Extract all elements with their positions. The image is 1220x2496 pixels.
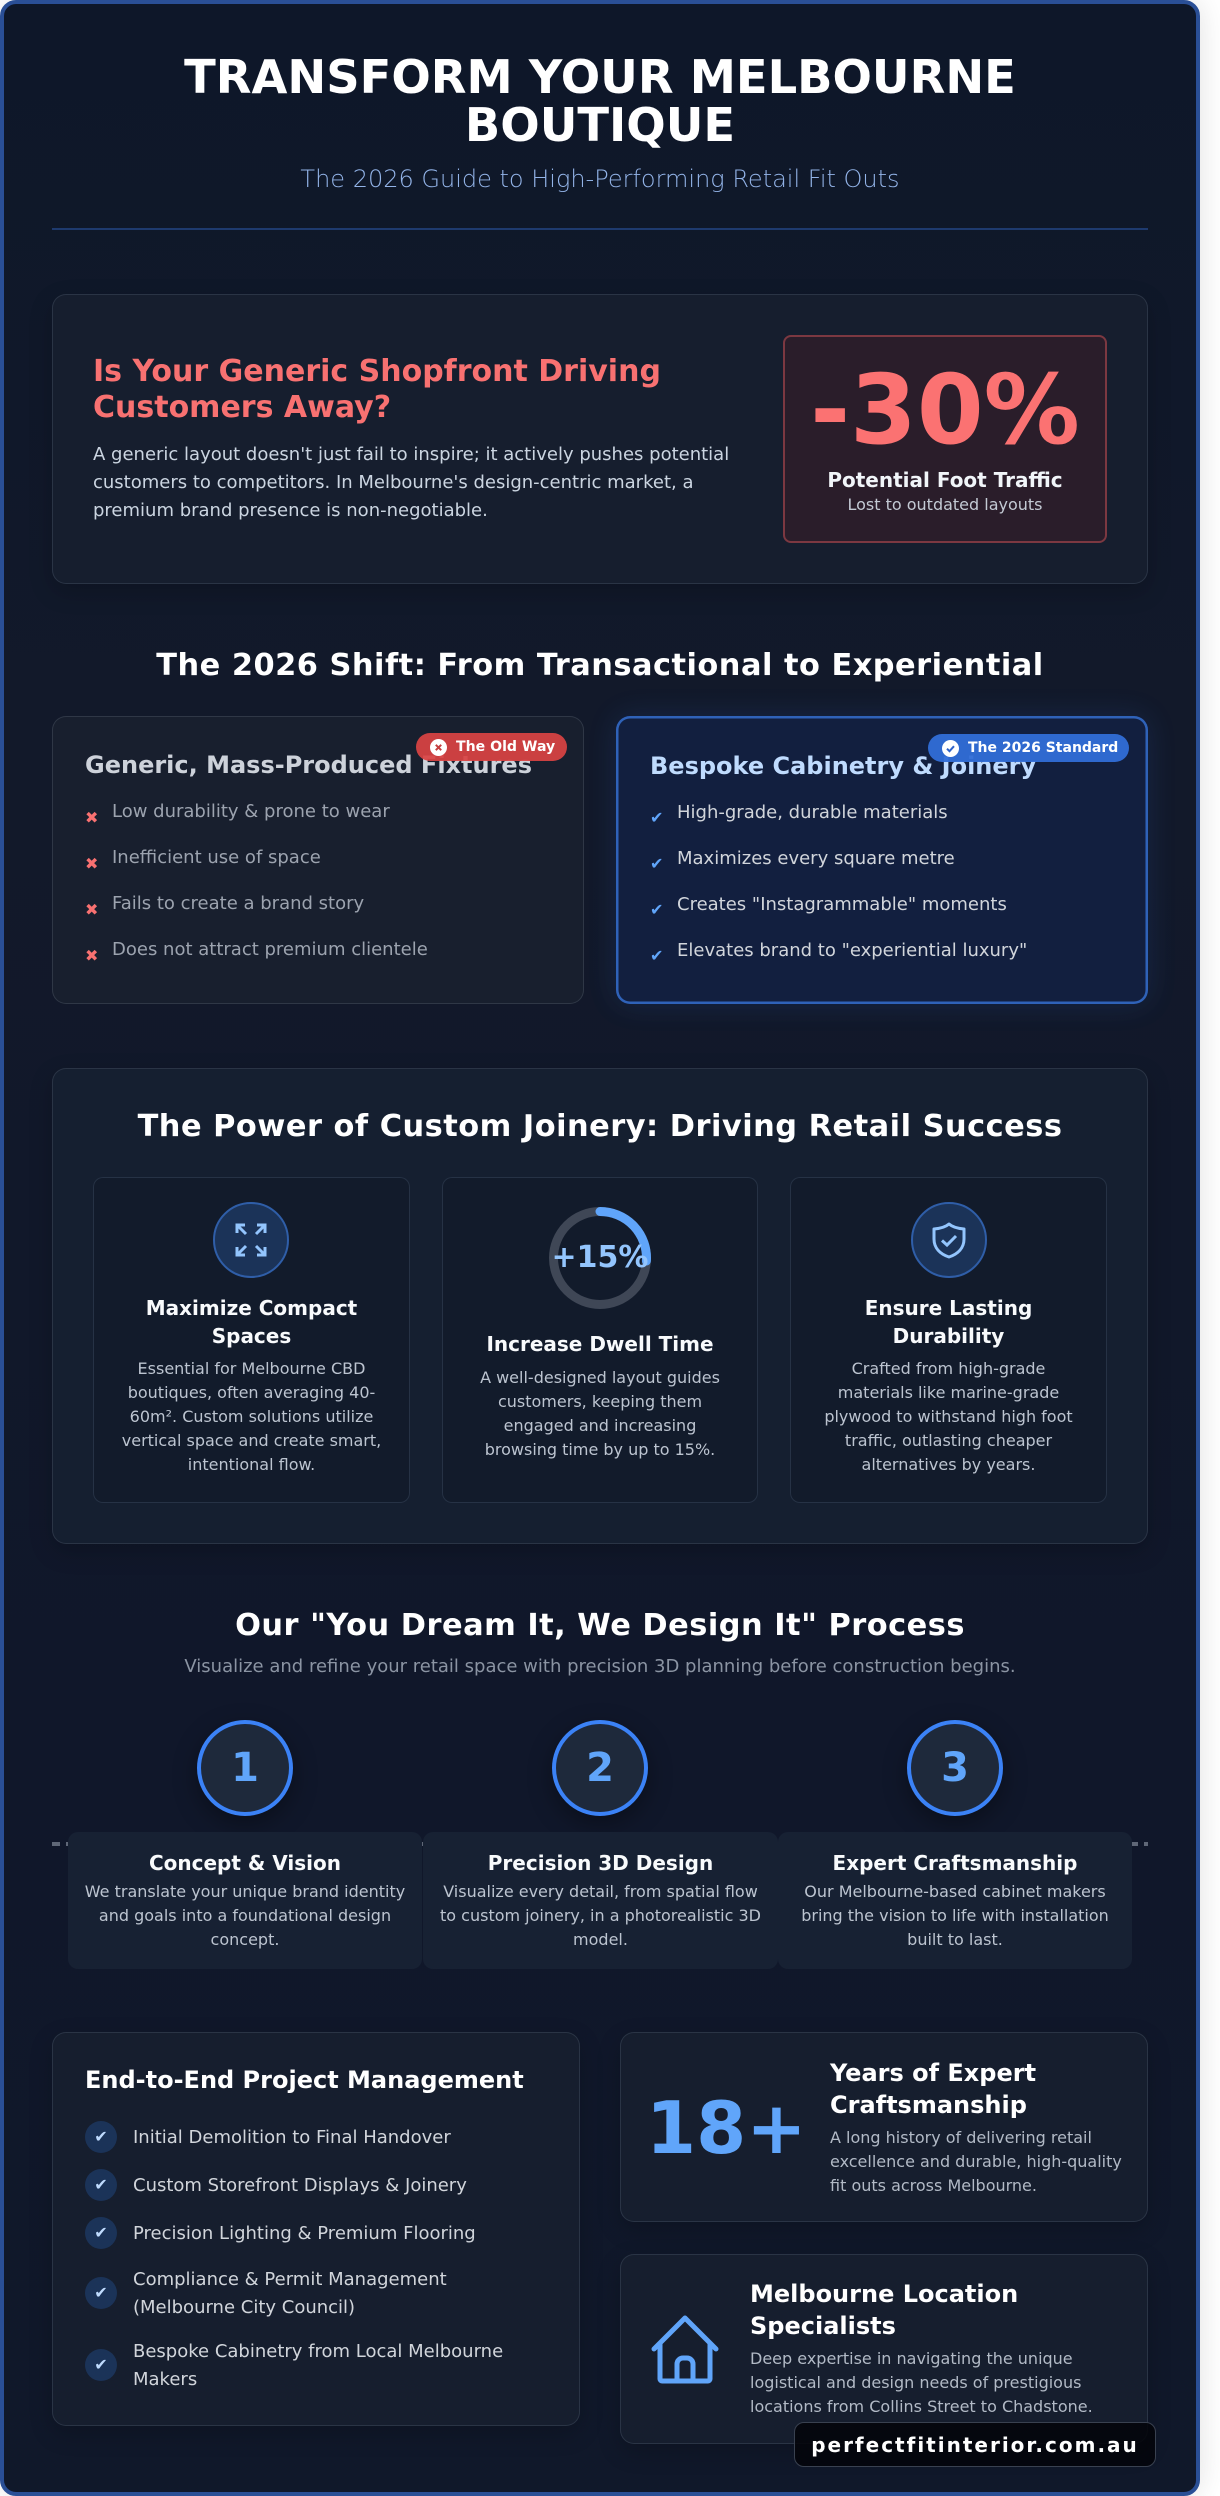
list: old way drawbacks: Inefficient use of space [112, 847, 321, 868]
card title: Maximize Compact [146, 1296, 357, 1320]
checklist: Makers [133, 2369, 197, 2390]
list: standard benefits: ✔ [650, 808, 663, 827]
ring value: +15% [552, 1240, 648, 1275]
stat value: -30% [810, 354, 1080, 466]
card text: 60m². Custom solutions utilize [130, 1407, 373, 1426]
step title: Precision 3D Design [488, 1851, 713, 1875]
card text: excellence and durable, high-quality [830, 2152, 1122, 2171]
problem text: customers to competitors. In Melbourne's design-centric market, a [93, 472, 693, 493]
step title: Concept & Vision [149, 1851, 341, 1875]
badge: the 2026 standard [928, 734, 1129, 762]
standard heading: Bespoke Cabinetry & Joinery [650, 752, 1036, 780]
list: old way drawbacks: ✖ [85, 900, 98, 919]
step card: craftsmanship [778, 1832, 1132, 1969]
checklist: ✔ [94, 2175, 108, 2194]
badge label: The 2026 Standard [968, 740, 1118, 756]
list: standard benefits: ✔ [650, 900, 663, 919]
list: old way drawbacks: ✖ [85, 854, 98, 873]
icon: expand arrows [213, 1202, 289, 1278]
icon: check circle [942, 740, 959, 757]
checklist: ✔ [94, 2127, 108, 2146]
website url: perfectfitinterior.com.au [811, 2433, 1139, 2457]
old way heading: Generic, Mass-Produced Fixtures [85, 751, 532, 779]
checklist: Bespoke Cabinetry from Local Melbourne [133, 2341, 503, 2362]
card text: A long history of delivering retail [830, 2128, 1092, 2147]
section heading: process: Our "You Dream It, We Design It" Process [235, 1608, 965, 1643]
checklist: ✔ [94, 2223, 108, 2242]
feature card: dwell time [442, 1177, 758, 1503]
process subtitle: Visualize and refine your retail space with precision 3D planning before construction begins. [184, 1656, 1016, 1677]
list: old way drawbacks [85, 801, 428, 965]
badge: the old way [416, 733, 567, 761]
list: old way drawbacks: Fails to create a brand story [112, 893, 364, 914]
step text: to custom joinery, in a photorealistic 3D [440, 1906, 761, 1925]
card title: Ensure Lasting [865, 1296, 1032, 1320]
step text [85, 1882, 405, 1949]
card title: Craftsmanship [830, 2091, 1027, 2119]
panel: problem [52, 294, 1148, 584]
problem text [93, 444, 729, 521]
panel: location specialists [620, 2254, 1148, 2444]
website badge [794, 2422, 1156, 2467]
icon: x circle [430, 739, 447, 756]
chart: plus 15 percent ring [549, 1207, 651, 1309]
step text: concept. [211, 1930, 279, 1949]
title: BOUTIQUE [465, 98, 735, 152]
card text: customers, keeping them [498, 1392, 702, 1411]
feature card: compact spaces [93, 1177, 410, 1503]
list: old way drawbacks: Low durability & prone to wear [112, 801, 390, 822]
card title [865, 1296, 1032, 1348]
card text: fit outs across Melbourne. [830, 2176, 1037, 2195]
feature card: durability [790, 1177, 1107, 1503]
card text: traffic, outlasting cheaper [845, 1431, 1052, 1450]
stat label: Potential Foot Traffic [827, 468, 1063, 492]
checklist: Precision Lighting & Premium Flooring [133, 2223, 476, 2244]
card title [830, 2059, 1036, 2119]
checklist: Custom Storefront Displays & Joinery [133, 2175, 467, 2196]
problem text: premium brand presence is non-negotiable. [93, 500, 488, 521]
problem text: A generic layout doesn't just fail to inspire; it actively pushes potential [93, 444, 729, 465]
list: standard benefits: High-grade, durable materials [677, 802, 948, 823]
card text: browsing time by up to 15%. [485, 1440, 715, 1459]
card text: intentional flow. [188, 1455, 315, 1474]
icon: house [652, 2316, 718, 2384]
list: standard benefits [650, 802, 1027, 965]
step text: Our Melbourne-based cabinet makers [804, 1882, 1106, 1901]
step 3 number: 3 [941, 1745, 969, 1791]
badge label: The Old Way [456, 739, 555, 755]
list: old way drawbacks: ✖ [85, 946, 98, 965]
card text: Essential for Melbourne CBD [138, 1359, 365, 1378]
card text: plywood to withstand high foot [824, 1407, 1073, 1426]
card title: Melbourne Location [750, 2280, 1018, 2308]
step text: We translate your unique brand identity [85, 1882, 405, 1901]
card text: engaged and increasing [504, 1416, 696, 1435]
panel: years of craftsmanship [620, 2032, 1148, 2222]
card title: Durability [893, 1324, 1004, 1348]
step text: and goals into a foundational design [99, 1906, 391, 1925]
process steps [68, 1720, 1132, 1969]
step title: Expert Craftsmanship [833, 1851, 1077, 1875]
checklist: Initial Demolition to Final Handover [133, 2127, 451, 2148]
card text [824, 1359, 1073, 1474]
card text: materials like marine-grade [838, 1383, 1059, 1402]
checklist [85, 2121, 503, 2390]
checklist: ✔ [94, 2355, 108, 2374]
panel heading: End-to-End Project Management [85, 2066, 524, 2094]
step 2 number [552, 1720, 648, 1816]
panel: old way [52, 716, 584, 1004]
card text: vertical space and create smart, [122, 1431, 381, 1450]
card title: Spaces [212, 1324, 291, 1348]
list: standard benefits: Elevates brand to "experiential luxury" [677, 940, 1027, 961]
card text: logistical and design needs of prestigious [750, 2373, 1081, 2392]
panel: 2026 standard [616, 716, 1148, 1004]
step card: 3D design [423, 1832, 778, 1969]
list: standard benefits: Maximizes every square metre [677, 848, 955, 869]
list: standard benefits: ✔ [650, 946, 663, 965]
step 2 number: 2 [586, 1745, 614, 1791]
step text: model. [573, 1930, 628, 1949]
step 1 number [197, 1720, 293, 1816]
card text [480, 1368, 720, 1459]
section heading: shift: The 2026 Shift: From Transactional to Experiential [156, 648, 1044, 683]
stat callout: foot traffic [783, 335, 1107, 543]
step text: built to last. [907, 1930, 1003, 1949]
card text [750, 2349, 1093, 2416]
checklist: Compliance & Permit Management [133, 2269, 447, 2290]
heading: generic shopfront: Is Your Generic Shopfront Driving [93, 354, 661, 389]
panel: power of custom joinery [52, 1068, 1148, 1544]
list: standard benefits: Creates "Instagrammable" moments [677, 894, 1007, 915]
checklist: (Melbourne City Council) [133, 2297, 355, 2318]
panel: project management [52, 2032, 580, 2426]
heading: generic shopfront: Customers Away? [93, 390, 391, 425]
card text: locations from Collins Street to Chadstone. [750, 2397, 1093, 2416]
step text: Visualize every detail, from spatial flow [443, 1882, 758, 1901]
subtitle: The 2026 Guide to High-Performing Retail Fit Outs [300, 165, 900, 193]
list: old way drawbacks: ✖ [85, 808, 98, 827]
stat: 18+: 18+ [646, 2086, 807, 2170]
card title: Years of Expert [830, 2059, 1036, 2087]
title [184, 50, 1016, 152]
card text: boutiques, often averaging 40- [128, 1383, 375, 1402]
card title: Specialists [750, 2312, 896, 2340]
card text: A well-designed layout guides [480, 1368, 720, 1387]
card title [146, 1296, 357, 1348]
step text [440, 1882, 761, 1949]
icon: shield check [911, 1202, 987, 1278]
step text: bring the vision to life with installation [801, 1906, 1109, 1925]
stat note: Lost to outdated layouts [847, 495, 1043, 514]
step 1 number: 1 [231, 1745, 259, 1791]
title: TRANSFORM YOUR MELBOURNE [184, 50, 1016, 104]
step 3 number [907, 1720, 1003, 1816]
list: old way drawbacks: Does not attract premium clientele [112, 939, 428, 960]
card title: Increase Dwell Time [486, 1332, 714, 1356]
step text [801, 1882, 1109, 1949]
section heading: joinery: The Power of Custom Joinery: Driving Retail Success [138, 1109, 1062, 1144]
card text: Deep expertise in navigating the unique [750, 2349, 1073, 2368]
step card: concept [68, 1832, 422, 1969]
checklist: ✔ [94, 2283, 108, 2302]
heading: generic shopfront [93, 354, 661, 425]
card text: alternatives by years. [862, 1455, 1035, 1474]
card text [122, 1359, 381, 1474]
list: standard benefits: ✔ [650, 854, 663, 873]
card text: Crafted from high-grade [852, 1359, 1045, 1378]
card title [750, 2280, 1018, 2340]
card text [830, 2128, 1122, 2195]
